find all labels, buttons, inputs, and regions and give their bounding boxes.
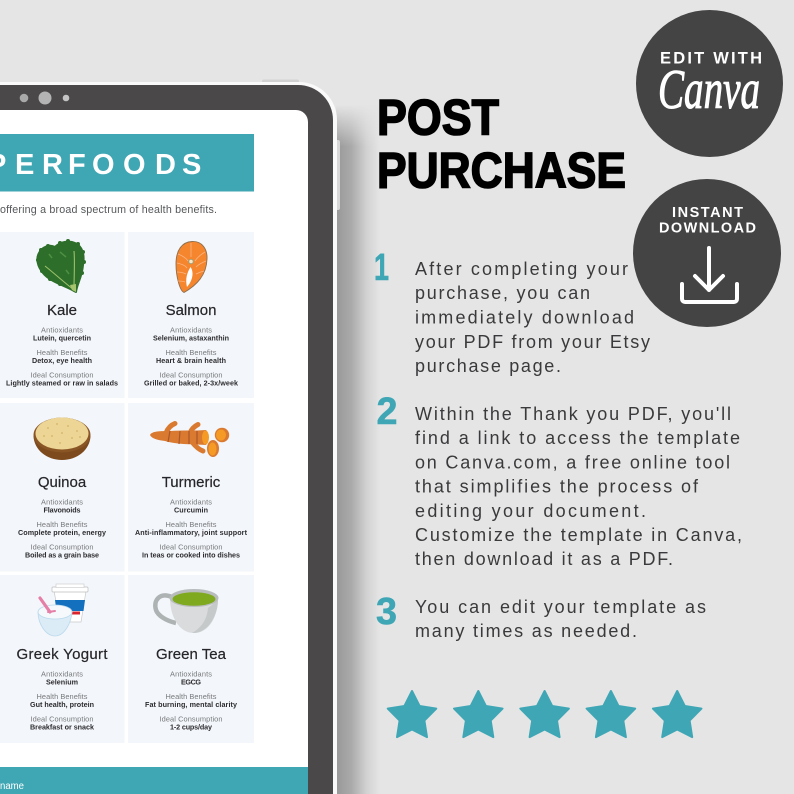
card: Quinoa [0,403,124,572]
icon: download arrow [682,248,737,302]
card: Salmon: Salmon [166,302,216,319]
heading: post purchase: POST [377,90,499,146]
intro text: offering a broad spectrum of health benefits. [0,204,217,216]
card: Quinoa: Antioxidants [41,498,83,506]
card: Green Tea: Green Tea [156,646,227,663]
card: Green Tea: Ideal Consumption [160,714,222,724]
badge: instant download: DOWNLOAD [659,220,756,236]
tablet drop shadow [336,109,374,794]
card: Greek Yogurt: Greek Yogurt [16,646,108,663]
footer band [0,767,310,794]
card: Greek Yogurt: Ideal Consumption [30,714,94,724]
step 1 [374,247,650,376]
footer band: name [0,781,25,792]
card: Greek Yogurt: Gut health, protein [30,700,94,709]
badge: instant download [633,179,781,327]
step 2: editing your document. [415,501,646,521]
card: Green Tea: Fat burning, mental clarity [145,700,237,709]
step 3: many times as needed. [415,621,637,641]
step 2: Within the Thank you PDF, you'll [415,404,731,424]
card: Turmeric: Health Benefits [166,520,217,529]
icon: yogurt cup and bowl [38,584,88,636]
step 2: on Canva.com, a free online tool [415,452,730,472]
step 2: Customize the template in Canva, [415,525,742,545]
heading: post purchase [377,90,626,198]
card: Quinoa: Quinoa [38,474,87,491]
card: Salmon: Ideal Consumption [160,370,222,380]
card: Turmeric: Curcumin [174,506,208,515]
badge: instant download: INSTANT [672,205,743,221]
card: Kale: Lightly steamed or raw in salads [6,379,118,388]
title banner [0,134,254,192]
card: Turmeric: Turmeric [162,474,221,491]
step 2: then download it as a PDF. [415,549,673,569]
card: Greek Yogurt: Antioxidants [41,670,83,678]
card: Turmeric: Ideal Consumption [160,542,222,552]
card: Kale: Detox, eye health [32,356,92,365]
step 2: that simplifies the process of [415,476,699,496]
card: Kale: Health Benefits [36,348,88,357]
icon: green tea cup [155,589,218,633]
card: Kale: Ideal Consumption [30,370,94,380]
card: Green Tea: Health Benefits [166,692,217,701]
card: Green Tea [128,575,254,743]
icon: kale leaf [36,239,86,292]
icon: turmeric root [150,424,229,457]
five star rating [388,691,702,737]
card: Green Tea: Antioxidants [170,670,212,678]
card: Salmon: Antioxidants [170,326,212,334]
card: Greek Yogurt [0,575,124,743]
card: Salmon [128,232,254,398]
step 2: find a link to access the template [415,428,740,448]
card: Quinoa: Complete protein, energy [18,528,106,537]
step 3: You can edit your template as [415,597,706,617]
card: Salmon: Health Benefits [166,348,217,357]
card: Quinoa: Flavonoids [44,506,80,515]
icon: quinoa bowl [34,418,90,460]
step 1: purchase, you can [415,283,590,303]
card: Quinoa: Health Benefits [36,520,88,529]
card: Green Tea: 1-2 cups/day [170,723,212,732]
step 1: 1 [374,247,389,289]
card: Kale: Lutein, quercetin [33,334,91,343]
badge: edit with canva [636,10,783,157]
card: Greek Yogurt: Breakfast or snack [30,723,94,732]
step 2 [376,391,742,569]
card: Turmeric: Anti-inflammatory, joint support [135,528,248,537]
card: Greek Yogurt: Selenium [46,678,78,687]
icon: salmon steak [176,241,207,292]
tablet mockup [0,80,340,794]
step 1: your PDF from your Etsy [415,332,650,352]
card: Turmeric: Antioxidants [170,498,212,506]
step 1: purchase page. [415,356,561,376]
tablet screen [0,110,310,794]
step 3 [376,591,706,641]
card: Turmeric: In teas or cooked into dishes [142,551,240,560]
card: Quinoa: Ideal Consumption [30,542,94,552]
card: Kale: Kale [47,302,77,319]
step 2: 2 [376,391,398,433]
step 1: immediately download [415,308,634,328]
card: Salmon: Heart & brain health [156,356,226,365]
step 1: After completing your [415,259,628,279]
card: Kale [0,232,124,398]
step 3: 3 [376,591,397,633]
badge: edit with canva: EDIT WITH [660,50,762,68]
card: Salmon: Grilled or baked, 2-3x/week [144,379,238,388]
card: Kale: Antioxidants [41,326,83,334]
card: Green Tea: EGCG [181,678,201,687]
card: Turmeric [128,403,254,572]
camera dots [20,92,69,104]
heading: post purchase: PURCHASE [377,142,626,198]
card: Quinoa: Boiled as a grain base [25,551,99,560]
card: Greek Yogurt: Health Benefits [36,692,88,701]
card: Salmon: Selenium, astaxanthin [153,334,229,343]
